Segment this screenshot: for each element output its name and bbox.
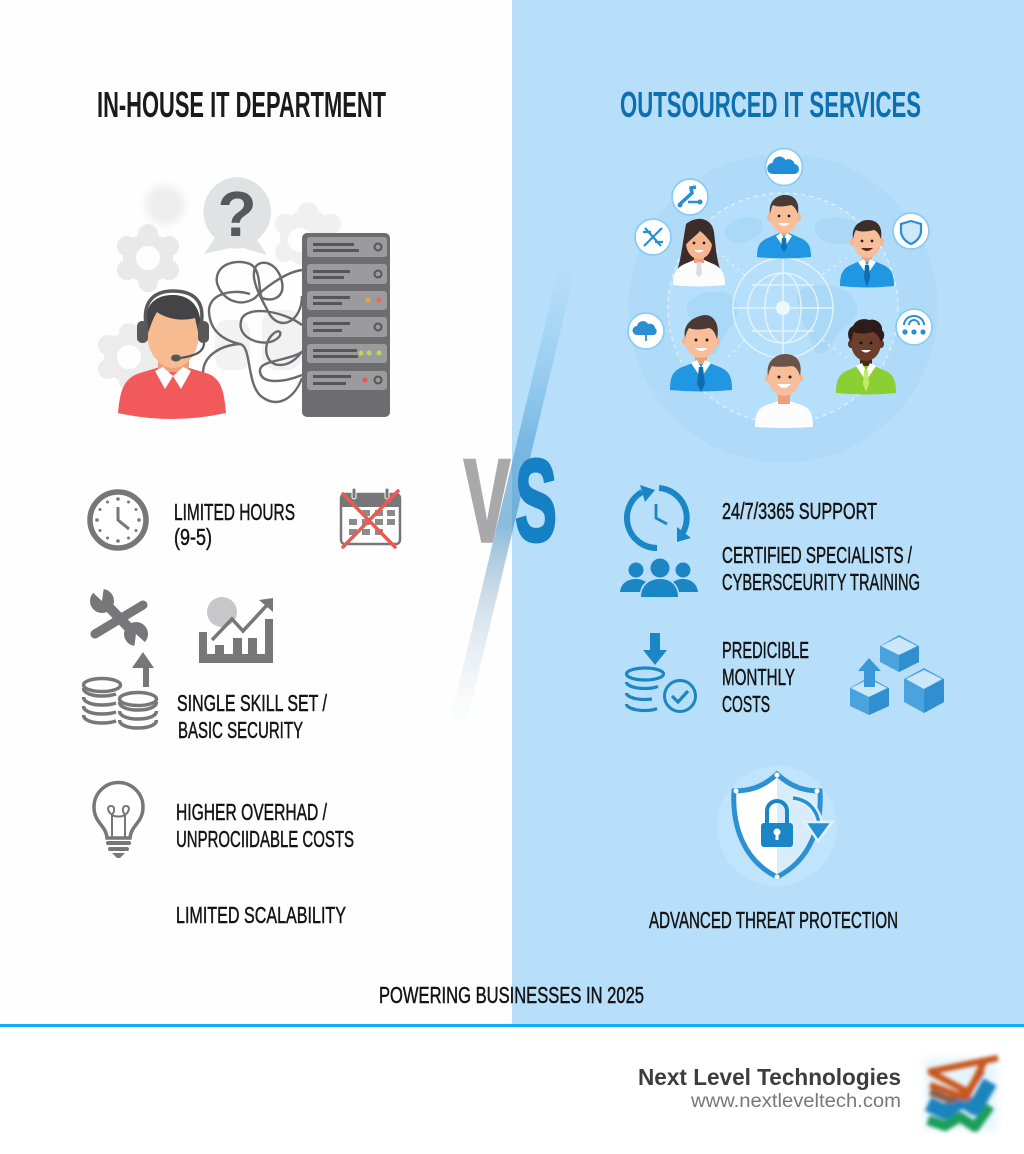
- label: predictable monthly costs: PREDICIBLE: [722, 637, 809, 663]
- label: higher overhead: [176, 799, 354, 852]
- tangled cables: [203, 262, 302, 402]
- person: right man in green: [836, 319, 896, 394]
- label: limited hours: LIMITED HOURS: [174, 499, 295, 525]
- icon: lightbulb: [94, 782, 143, 858]
- icon: database with down arrow and check: [626, 633, 696, 712]
- technician with headset: [118, 291, 226, 419]
- label: higher overhead: HIGHER OVERHAD /: [176, 799, 327, 825]
- icon: scaling cubes: [850, 635, 944, 715]
- icon: crossed wrenches: [90, 586, 148, 649]
- item: limited hours: [90, 488, 400, 550]
- icon: clock with cycle arrows: [627, 485, 691, 548]
- icon: shield: [893, 213, 929, 249]
- label: predictable monthly costs: COSTS: [722, 691, 770, 717]
- label: single skill set: SINGLE SKILL SET /: [177, 690, 327, 716]
- icon: coins with up arrow: [84, 652, 156, 728]
- item: higher overhead: [94, 782, 354, 858]
- footer background: [0, 1027, 1024, 1154]
- label: limited scalability: LIMITED SCALABILITY: [176, 902, 346, 928]
- icon: crossed-out calendar: [341, 488, 400, 547]
- label: limited hours: [174, 499, 295, 550]
- label: limited hours: (9-5): [174, 524, 212, 550]
- diagonal divider band: [448, 262, 577, 730]
- footer brand text: www.nextleveltech.com: [690, 1091, 901, 1112]
- footer brand text: [638, 1064, 901, 1112]
- item: advanced threat protection: [649, 766, 898, 933]
- icon: wrench: [672, 179, 708, 215]
- logo: Next Level Technologies mark: [925, 1058, 998, 1130]
- icon: cloud: [766, 148, 802, 186]
- label: certified specialists: CERTIFIED SPECIALISTS /: [722, 542, 912, 568]
- footer rule: [0, 1024, 1024, 1027]
- icon: shield with padlock: [717, 766, 837, 886]
- question bubble: [203, 177, 271, 255]
- icon: team: [620, 558, 698, 597]
- panel: in-house background: [0, 0, 512, 1024]
- label: single skill set: BASIC SECURITY: [178, 717, 303, 743]
- label: higher overhead: UNPROCIIDABLE COSTS: [176, 826, 354, 852]
- faint background gears: [98, 185, 341, 391]
- person: woman in white: [673, 219, 725, 286]
- item: 24/7 support: [627, 485, 877, 548]
- world globe network background: [628, 153, 938, 463]
- icon: cloud download: [628, 313, 664, 349]
- person: right man in blue: [840, 220, 894, 288]
- question bubble: ?: [217, 178, 257, 250]
- person: top man in blue: [757, 195, 811, 258]
- icon: network: [896, 309, 932, 345]
- label: predictable monthly costs: MONTHLY: [722, 664, 795, 690]
- icon: rising chart with wrench: [199, 597, 273, 663]
- person: lower-left man in blue: [670, 315, 732, 392]
- label: certified specialists: [722, 542, 920, 595]
- icon: crossed tools: [635, 219, 671, 255]
- VS emblem: V: [464, 435, 510, 566]
- item: certified specialists: [620, 542, 920, 597]
- label: single skill set: [177, 690, 327, 743]
- VS emblem: S: [515, 435, 557, 566]
- item: single skill set / basic security: [84, 586, 327, 743]
- person: bottom man in white: [755, 354, 813, 428]
- label: 24/7 support: 24/7/3365 SUPPORT: [722, 498, 877, 524]
- panel: outsourced background: [512, 0, 1024, 1024]
- footer brand text: Next Level Technologies: [638, 1064, 901, 1090]
- server rack: [302, 233, 390, 417]
- item: predictable monthly costs: [626, 633, 944, 717]
- illustration: overwhelmed in-house technician with server rack: [98, 177, 390, 419]
- label: predictable monthly costs: [722, 637, 809, 717]
- icon: clock: [90, 492, 146, 548]
- title: in-house: IN-HOUSE IT DEPARTMENT: [97, 84, 386, 125]
- tagline: POWERING BUSINESSES IN 2025: [379, 982, 644, 1008]
- illustration: global team of outsourced specialists: [628, 148, 938, 463]
